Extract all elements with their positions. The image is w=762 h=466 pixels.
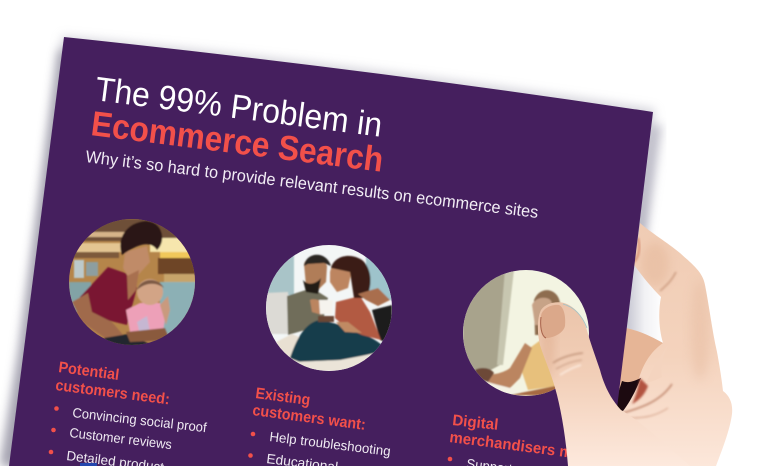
column 2 heading: customers want: <box>251 402 367 434</box>
second finger <box>612 328 663 408</box>
column 3 heading: merchandisers m <box>448 429 574 462</box>
column 3: digital merchandisers <box>448 412 574 466</box>
column 1 bullets: Convincing social proof <box>72 405 208 435</box>
column 1 bullets <box>49 405 208 466</box>
photo: couple on sofa <box>266 245 392 371</box>
column 1 heading: customers need: <box>54 377 171 408</box>
photo: digital merchandiser at desk <box>463 270 589 396</box>
column 2: existing customers <box>248 385 392 466</box>
column 1: potential customers <box>49 359 208 466</box>
gap between fingers <box>626 262 663 343</box>
title: The 99% Problem in <box>93 70 384 145</box>
photo: mother and baby <box>69 219 200 347</box>
hand: fingers behind the sheet <box>617 223 732 466</box>
title <box>89 70 386 180</box>
hand: thumb in front <box>538 302 634 466</box>
column 3 heading: Digital <box>452 412 499 434</box>
subtitle: Why it’s so hard to provide relevant results on ecommerce sites <box>85 147 539 222</box>
purple sheet <box>9 37 653 466</box>
column 2 bullets <box>248 429 392 466</box>
column 1 bullets: Customer reviews <box>69 425 173 452</box>
column 2 heading <box>251 385 367 434</box>
column 3 heading <box>448 412 574 462</box>
column 1 heading: Potential <box>57 359 120 384</box>
column 2 heading: Existing <box>254 385 311 409</box>
blue page fragment <box>80 463 97 466</box>
dark gap in palm <box>615 378 641 411</box>
column 1 heading <box>54 359 171 408</box>
column 2 bullets: Help troubleshooting <box>269 429 392 459</box>
thumbnail <box>541 305 565 338</box>
title highlight: Ecommerce Search <box>89 104 386 180</box>
